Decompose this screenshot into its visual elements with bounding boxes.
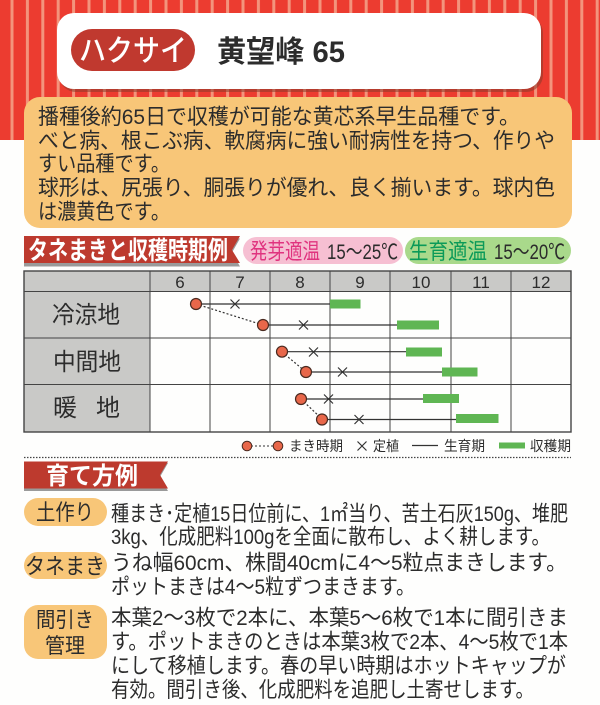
growth lines [196, 304, 456, 420]
region labels: 暖 [53, 395, 77, 422]
germination temperature pill: 発芽適温 [250, 239, 320, 264]
month labels: 9 [355, 273, 365, 292]
region labels: 中間地 [53, 349, 121, 376]
text: sowing: ポットまきは4～5粒ずつまきます。 [111, 575, 415, 599]
region labels: 冷涼地 [52, 302, 120, 329]
label: soil preparation: 土作り [36, 500, 94, 525]
description panel: 球形は、尻張り、胴張りが優れ、良く揃います。球内色 [38, 176, 555, 200]
description panel: べと病、根こぶ病、軟腐病に強い耐病性を持つ、作りや [38, 129, 555, 153]
description panel: すい品種です。 [38, 152, 170, 176]
calendar chart [24, 271, 571, 432]
text: sowing [111, 551, 567, 599]
label: thinning and management: 管理 [45, 635, 85, 658]
text: sowing: うね幅60cm、株間40cmに4～5粒点まきします。 [111, 551, 567, 575]
month labels: 11 [472, 273, 490, 292]
label: sowing: タネまき [25, 554, 105, 579]
month labels: 12 [532, 273, 550, 292]
region labels [52, 302, 121, 422]
sowing period dotted links [196, 304, 322, 419]
growth temperature pill: 生育適温 [409, 239, 487, 264]
heading: growing guide: 育て方例 [46, 463, 138, 490]
sowing circles [190, 298, 328, 425]
heading: growing guide [24, 462, 168, 491]
title card [57, 13, 543, 92]
growth temperature pill: 15～20℃ [494, 241, 565, 264]
transplant crosses [230, 300, 364, 424]
month labels: 6 [175, 273, 185, 292]
legend: 収穫期 [530, 438, 571, 454]
heading: sowing and harvest calendar: タネまきと収穫時期例 [28, 237, 228, 265]
legend: まき時期 [289, 438, 343, 454]
text: thinning and management [111, 606, 568, 702]
growth temperature pill [405, 237, 571, 264]
month labels: 10 [412, 273, 430, 292]
variety name: 黄望峰 65 [217, 36, 345, 69]
harvest bars [330, 300, 498, 423]
description panel: は濃黄色です。 [38, 200, 170, 224]
month labels: 8 [295, 273, 305, 292]
germination temperature pill [243, 237, 403, 264]
germination temperature pill: 15～25℃ [327, 241, 398, 264]
text: soil preparation [111, 501, 568, 549]
label: thinning and management [24, 605, 107, 659]
striped header band [0, 0, 600, 140]
region labels: 地 [96, 395, 120, 422]
description panel [24, 97, 572, 228]
description panel: 播種後約65日で収穫が可能な黄芯系早生品種です。 [38, 105, 520, 129]
legend: 生育期 [444, 438, 485, 454]
category pill: ハクサイ [79, 35, 187, 68]
legend [242, 438, 571, 454]
month labels [175, 273, 550, 292]
label: thinning and management: 間引き [36, 609, 94, 632]
month labels: 7 [235, 273, 245, 292]
legend: 定植 [373, 438, 399, 454]
text: thinning and management: 有効。間引き後、化成肥料を追肥し土寄せします。 [111, 678, 534, 702]
text: thinning and management: 本葉2～3枚で2本に、本葉5～6枚で1本に間引きま [111, 606, 568, 630]
